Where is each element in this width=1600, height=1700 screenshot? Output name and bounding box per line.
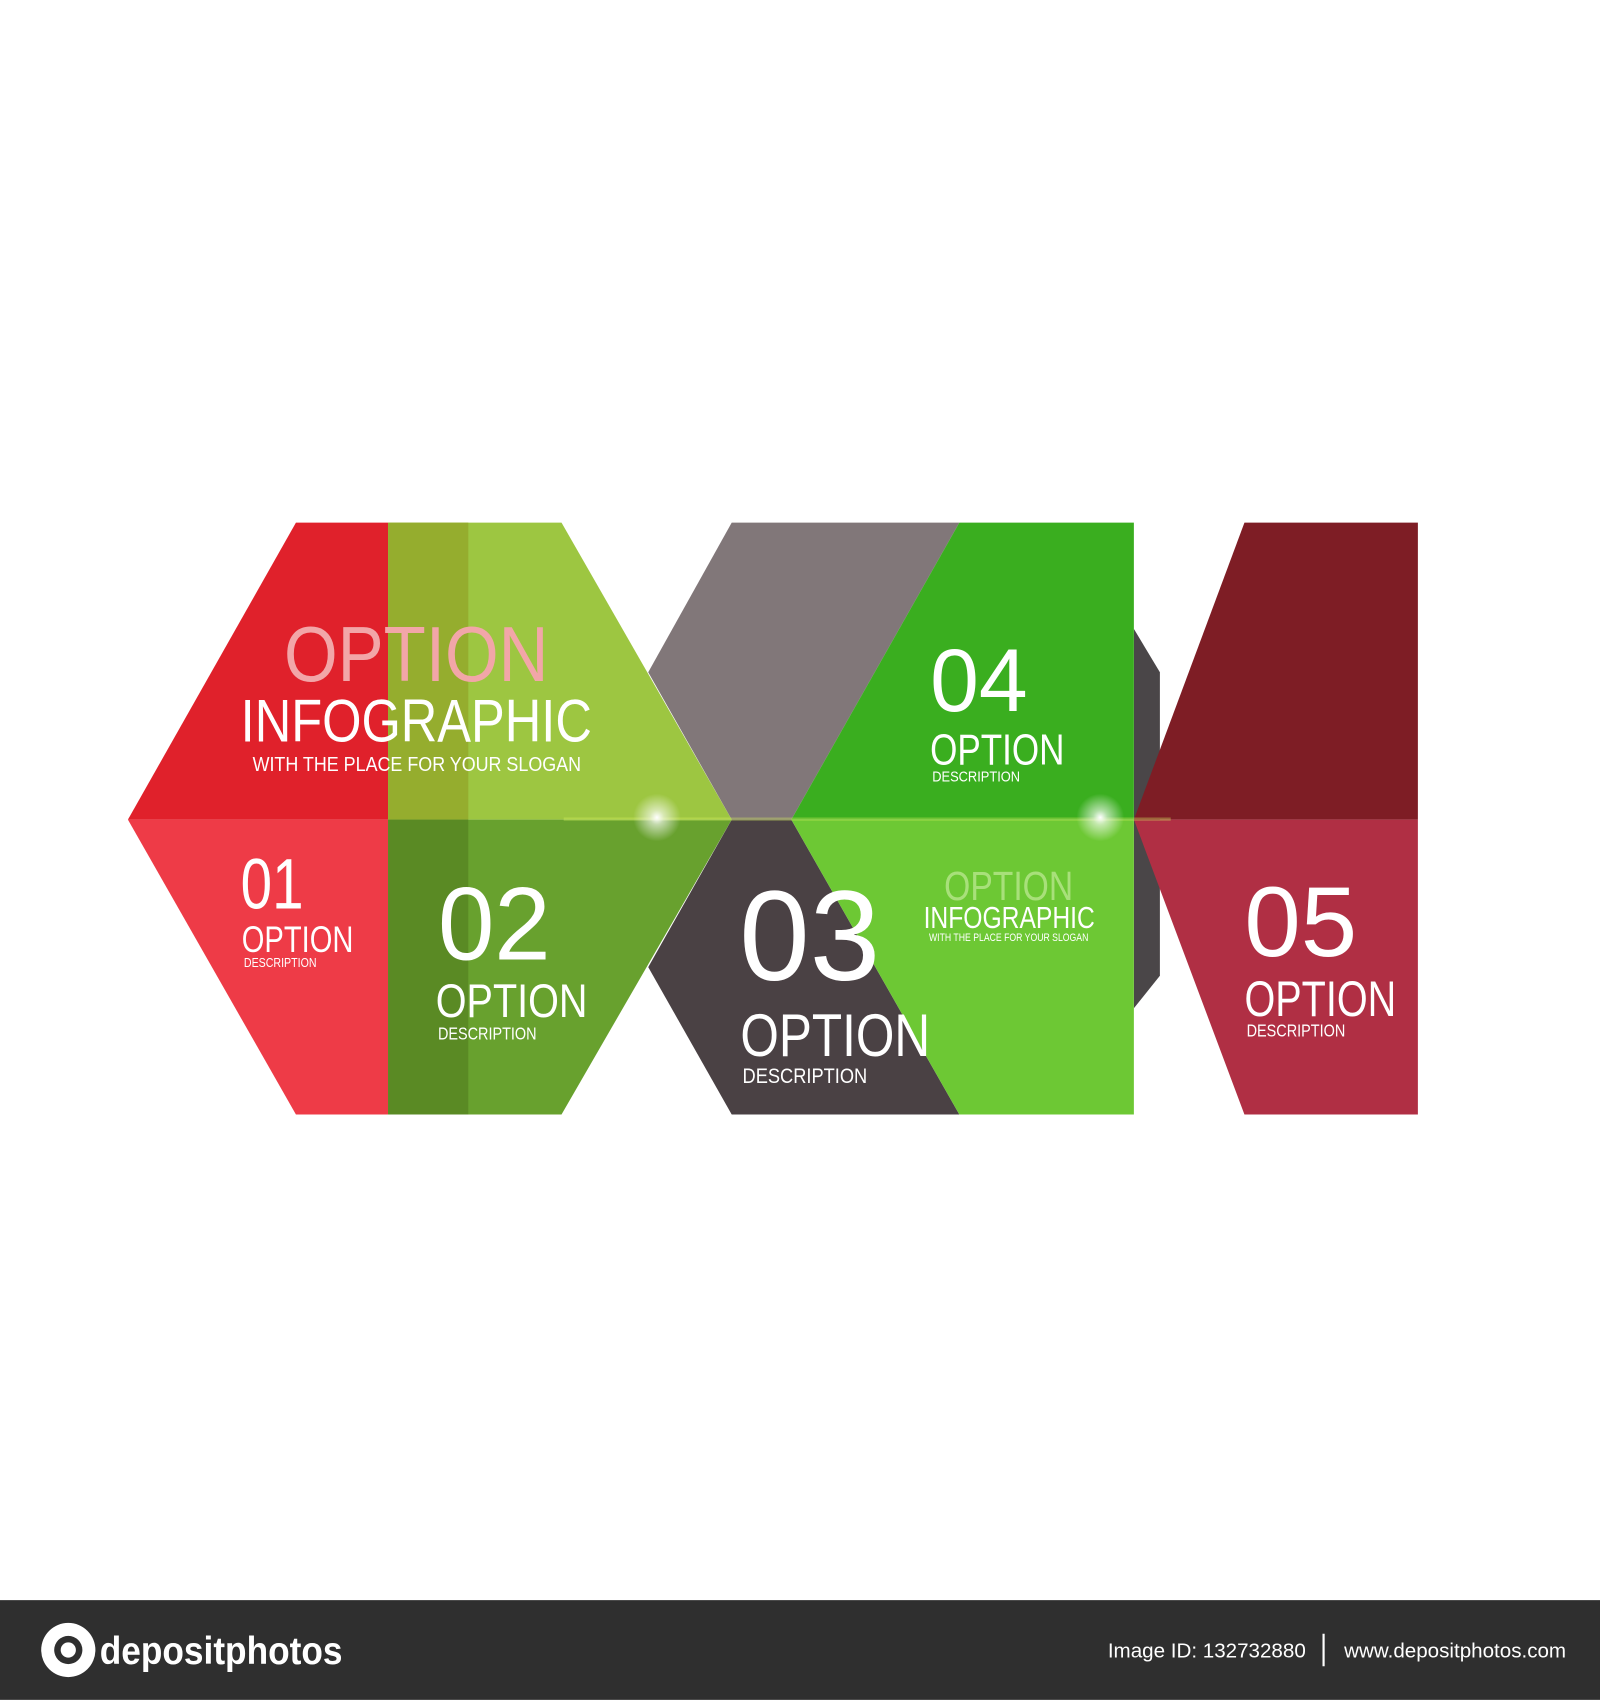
text: option 02: DESCRIPTION — [438, 1024, 537, 1044]
icon: logo — [41, 1623, 95, 1677]
footer bar: www.depositphotos.com — [1343, 1640, 1566, 1663]
text: title block: INFOGRAPHIC — [241, 687, 592, 755]
text: option 03: 03 — [739, 865, 880, 1008]
text: option 03: OPTION — [740, 1001, 930, 1069]
text: title block — [241, 610, 592, 776]
text: option 01: DESCRIPTION — [244, 955, 317, 970]
panel: red bottom 01 — [128, 820, 388, 1114]
text: title block: OPTION — [284, 610, 549, 698]
text: option 05: OPTION — [1244, 971, 1396, 1027]
text: option 05 — [1244, 867, 1396, 1040]
text: option 03: DESCRIPTION — [743, 1063, 867, 1088]
text: option 01 — [241, 845, 353, 970]
footer bar: Image ID: 132732880 — [1108, 1640, 1306, 1663]
text: small infographic: WITH THE PLACE FOR YOUR SLOGAN — [929, 932, 1088, 944]
text: option 02: OPTION — [436, 975, 588, 1028]
panel: maroon bottom 05 — [1134, 820, 1418, 1114]
text: option 03 — [739, 865, 930, 1088]
text: option 04: OPTION — [930, 726, 1064, 774]
text: small infographic — [924, 863, 1095, 944]
text: option 04 — [930, 631, 1064, 786]
panel: small dark edge — [1134, 629, 1160, 1008]
panel: green top 04 — [791, 523, 1134, 820]
panel: green top 02 — [388, 523, 732, 820]
text: option 04: DESCRIPTION — [932, 769, 1020, 786]
panel: green bottom 02 — [388, 820, 732, 1114]
text: option 01: 01 — [241, 845, 304, 925]
text: title block: WITH THE PLACE FOR YOUR SLOGAN — [253, 753, 581, 776]
footer bar: depositphotos — [100, 1630, 343, 1673]
footer bar — [0, 1600, 1600, 1700]
panel: dark bottom 03 — [648, 820, 959, 1114]
text: small infographic: OPTION — [944, 863, 1073, 909]
panel: green bottom 04 — [791, 820, 1134, 1114]
text: option 04: 04 — [930, 631, 1028, 730]
panel: grey top — [648, 523, 959, 820]
text: option 05: 05 — [1244, 867, 1357, 978]
glow line — [564, 794, 1171, 841]
text: small infographic: INFOGRAPHIC — [924, 902, 1095, 935]
text: option 02: 02 — [438, 866, 551, 982]
text: option 05: DESCRIPTION — [1247, 1020, 1345, 1040]
text: option 02 — [436, 866, 588, 1044]
panel: red top — [128, 523, 388, 820]
text: option 01: OPTION — [242, 919, 353, 960]
panel: maroon top — [1134, 523, 1418, 820]
